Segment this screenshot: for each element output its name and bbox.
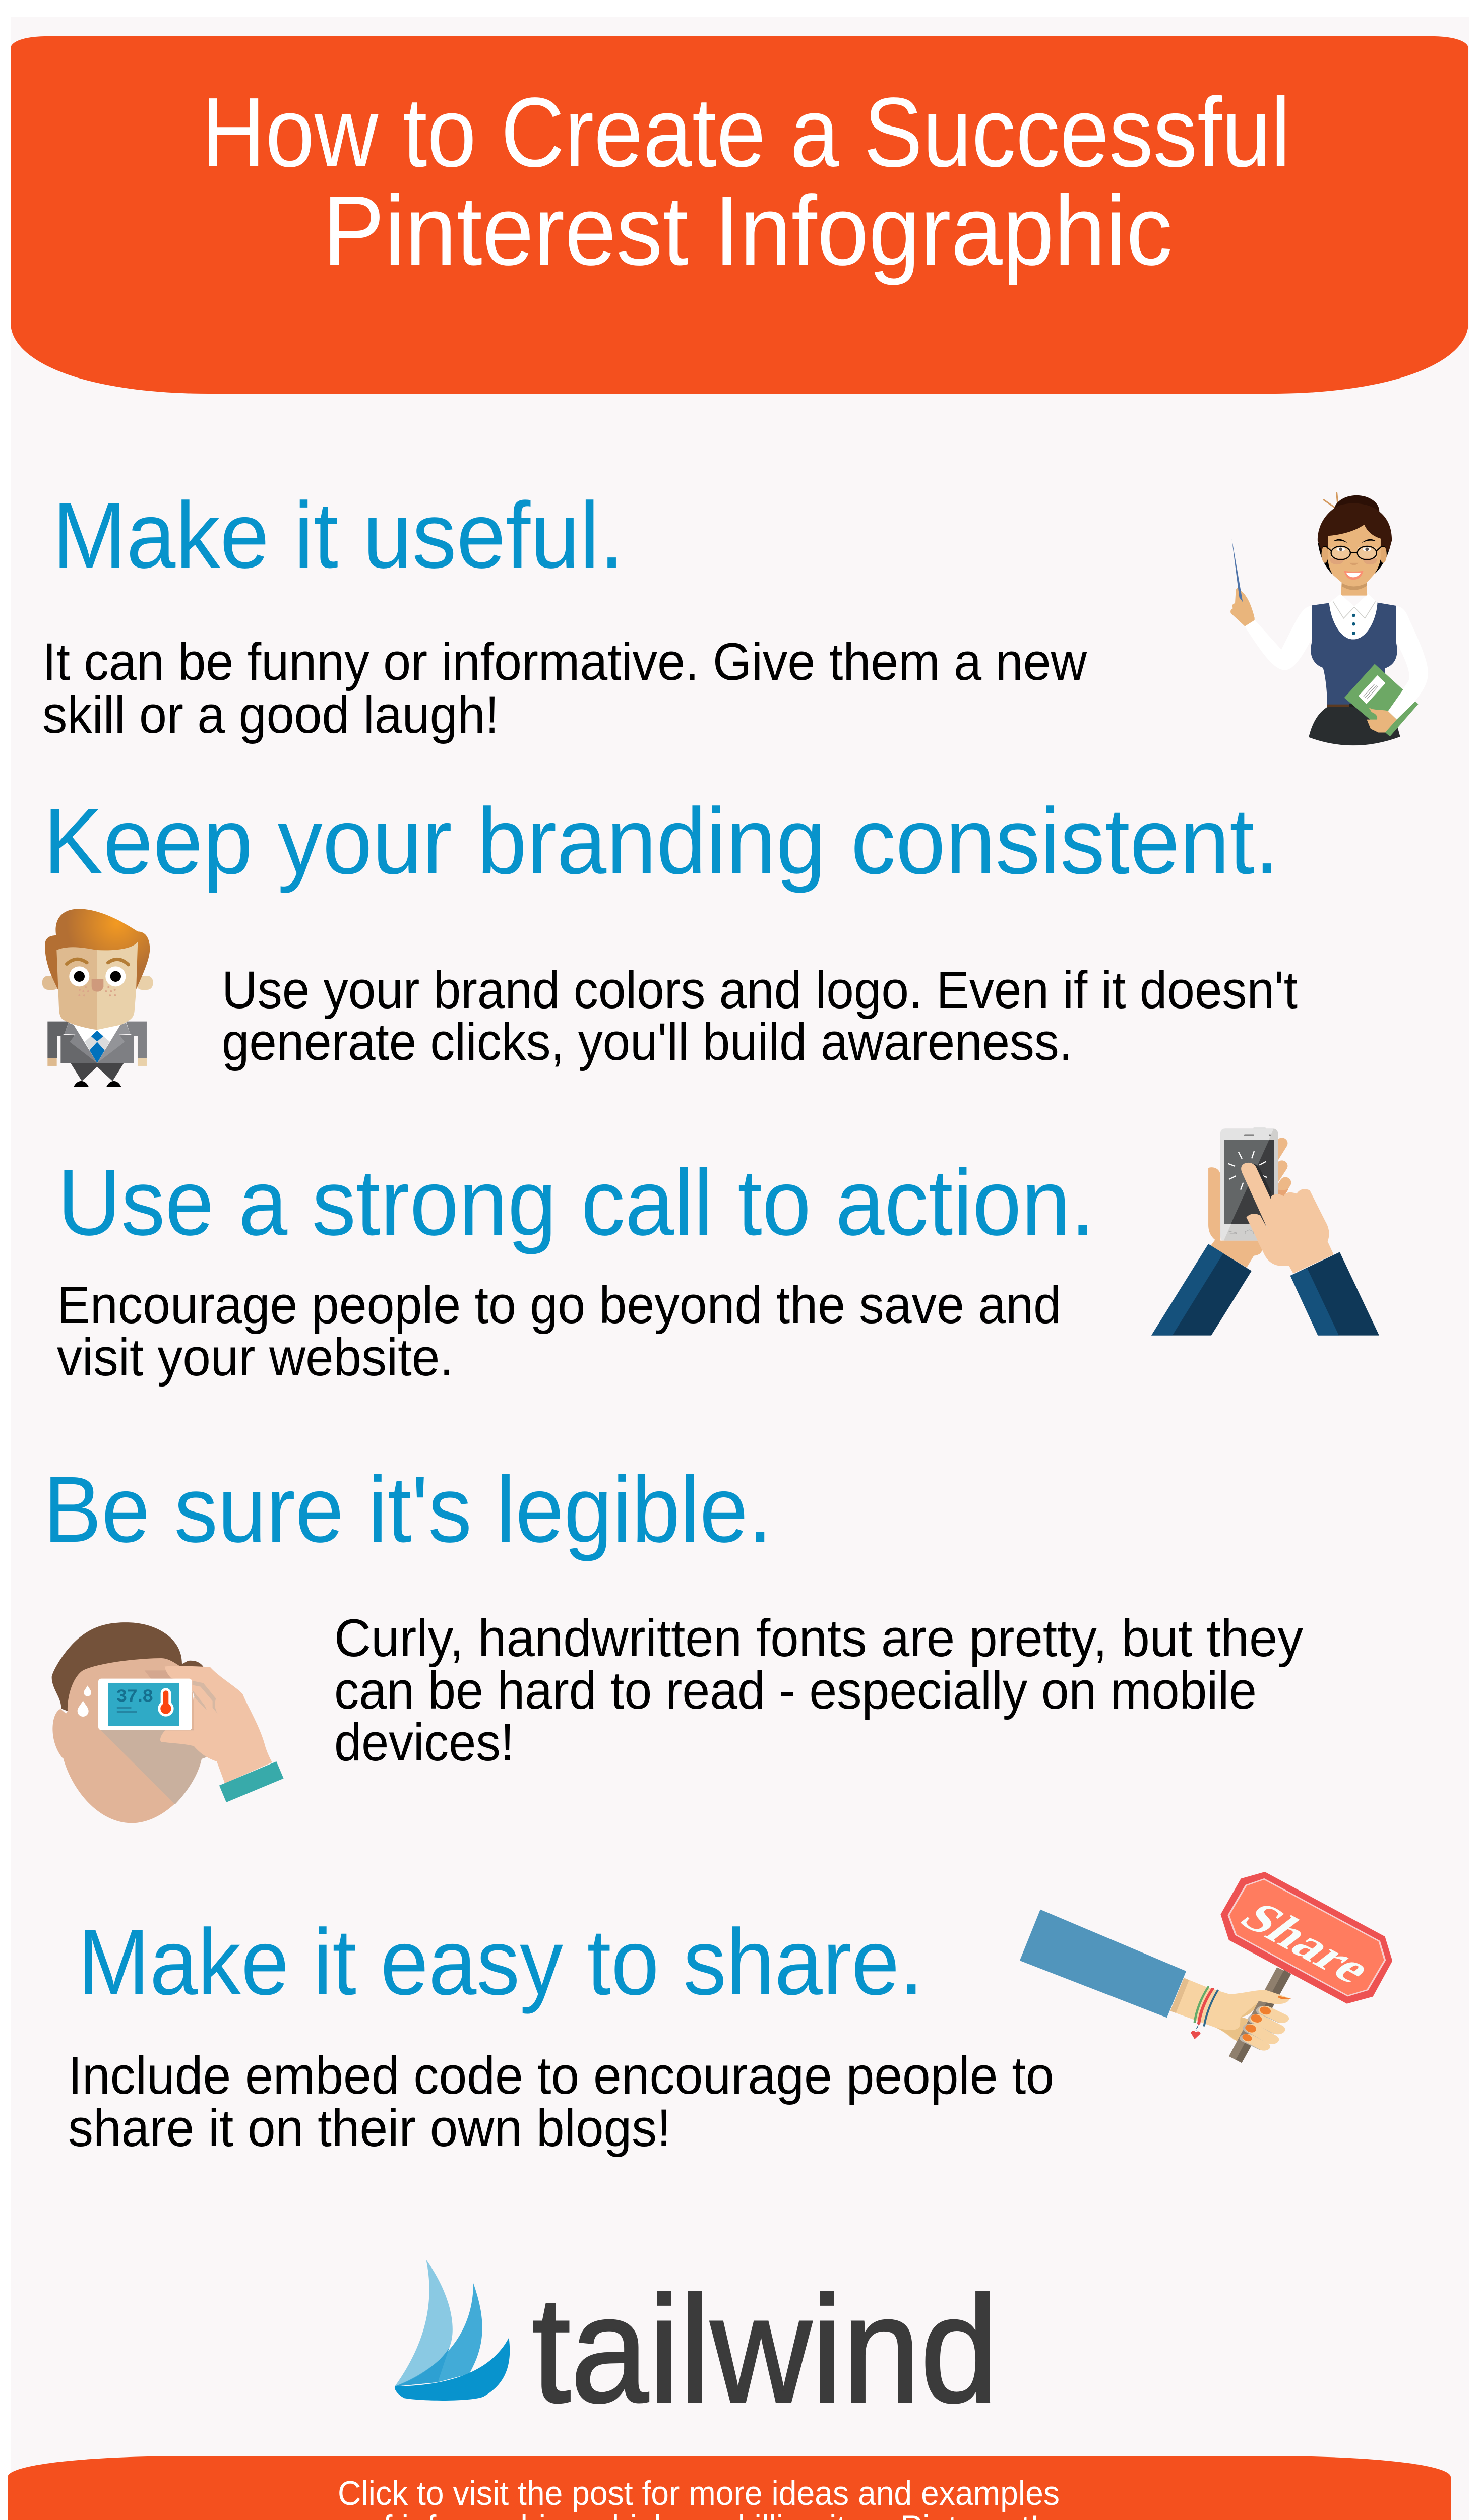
heading: legible: Be sure it's legible. (43, 1458, 772, 1562)
icon: businessman (42, 909, 153, 1087)
body: branding: Use your brand colors and logo. Even if it doesn't (222, 961, 1298, 1020)
body: call to action: visit your website. (57, 1328, 454, 1387)
body: legible: can be hard to read - especially on mobile (334, 1661, 1257, 1720)
body: call to action (57, 1276, 1061, 1387)
body: legible: devices! (334, 1713, 514, 1772)
body: share: Include embed code to encourage people to (68, 2046, 1054, 2105)
section: legible (43, 1458, 1303, 1823)
body: make it useful (42, 633, 1087, 744)
title: Pinterest Infographic (323, 175, 1173, 286)
heading: call to action: Use a strong call to action. (57, 1151, 1095, 1255)
icon: hand holding share sign (1020, 1872, 1392, 2063)
icon: hands tapping phone (1151, 1127, 1379, 1336)
body: share: share it on their own blogs! (68, 2099, 671, 2158)
section: call to action (57, 1127, 1379, 1387)
icon: face with thermometer phone: 37.8 (116, 1686, 153, 1706)
wordmark: tailwind (532, 2264, 998, 2434)
icon: tailwind sails (395, 2259, 510, 2401)
title (202, 77, 1290, 286)
footer banner (8, 2456, 1451, 2520)
section: share (68, 1872, 1392, 2158)
body: legible: Curly, handwritten fonts are pretty, but they (334, 1609, 1303, 1668)
body: legible (334, 1609, 1303, 1772)
body: branding (222, 961, 1298, 1072)
heading: branding: Keep your branding consistent. (43, 789, 1279, 894)
body: call to action: Encourage people to go beyond the save and (57, 1276, 1061, 1335)
body: make it useful: skill or a good laugh! (42, 685, 499, 744)
title: How to Create a Successful (202, 77, 1290, 187)
body: share (68, 2046, 1054, 2158)
heading: share: Make it easy to share. (78, 1910, 923, 2014)
icon: hand holding share sign: Share (1228, 1895, 1385, 1991)
section: branding (42, 789, 1298, 1087)
body: branding: generate clicks, you'll build awareness. (222, 1013, 1073, 1072)
heading: make it useful: Make it useful. (52, 483, 624, 588)
logo: tailwind (395, 2259, 998, 2434)
body: make it useful: It can be funny or informative. Give them a new (42, 633, 1087, 691)
icon: face with thermometer phone (52, 1622, 284, 1823)
section: make it useful (42, 483, 1428, 745)
header banner (11, 36, 1468, 394)
icon: teacher (1230, 493, 1428, 745)
footer text: Click to visit the post for more ideas and examples (338, 2474, 1060, 2512)
